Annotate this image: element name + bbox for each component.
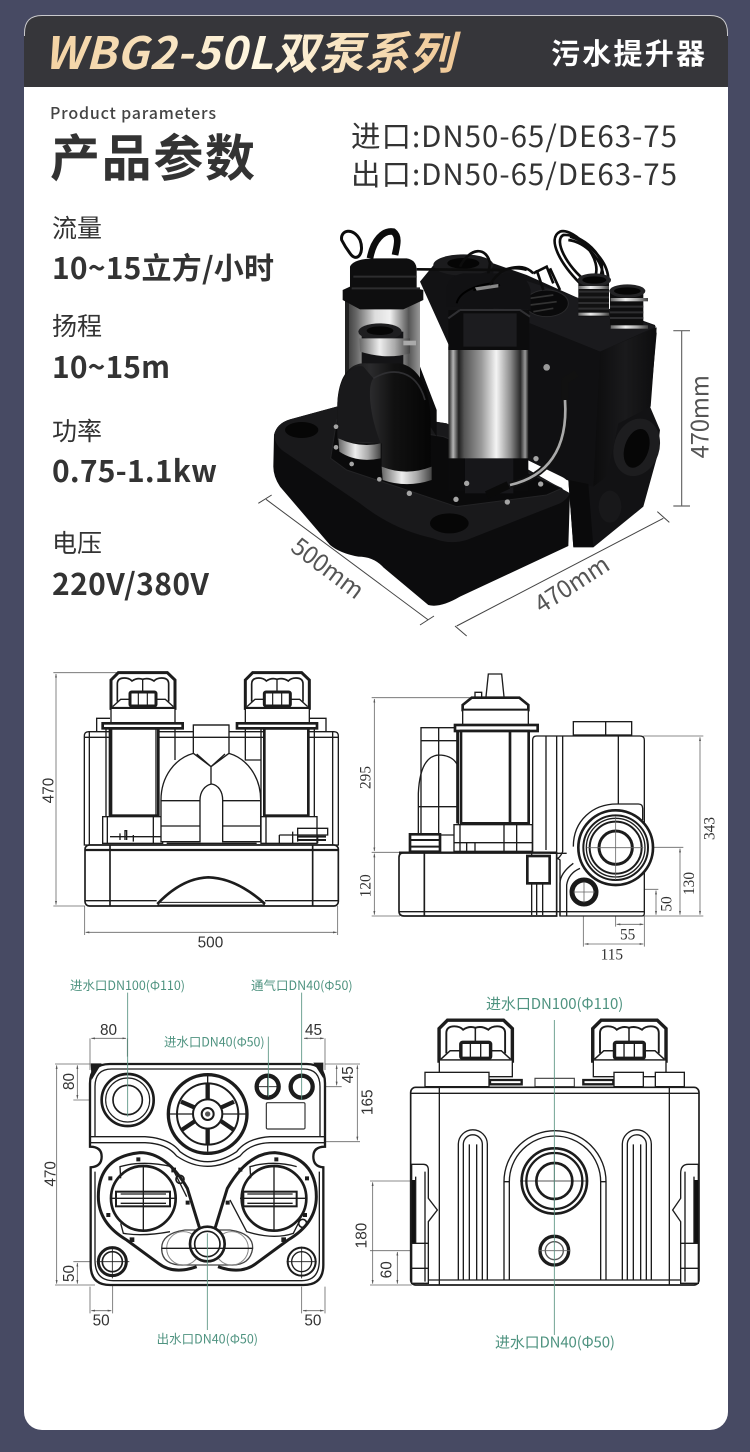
spec: head: [52, 307, 170, 387]
inlet and outlet sizes: 出口:DN50-65/DE63-75: [351, 152, 677, 194]
top view dimensions: 45: [305, 1022, 322, 1039]
section heading: 产品参数: [50, 119, 255, 191]
side outlet port: [606, 412, 667, 482]
inlet circle: [102, 1074, 154, 1126]
pump seats: [98, 1153, 316, 1270]
hose to tank: [487, 364, 577, 495]
spec: head: 10~15m: [52, 343, 170, 387]
front view dimensions: 470: [40, 778, 57, 803]
centre arch: [504, 1131, 606, 1280]
outlet cluster: [162, 1227, 253, 1265]
callouts: 进水口DN40(Φ50): [495, 1331, 615, 1352]
tank outline: [90, 1063, 325, 1285]
corrugated hoses: [578, 273, 648, 329]
spec: flow: [52, 209, 274, 288]
top view dimensions: 470: [42, 1161, 59, 1187]
dimension: height: [673, 331, 715, 506]
rib left: [458, 1130, 487, 1280]
side view dimensions: 295: [358, 766, 375, 789]
twin discharge pipe: [161, 725, 261, 843]
tank body: [420, 263, 660, 547]
callouts: 进水口DN40(Φ50): [164, 1033, 265, 1051]
side view dimensions: 115: [601, 946, 623, 963]
base: [399, 853, 644, 916]
side view dimensions: 120: [358, 874, 375, 897]
drawing: front view: [40, 673, 338, 951]
small ports: [257, 1076, 313, 1129]
spec: voltage: 电压: [52, 524, 102, 560]
inlet and outlet sizes: [351, 114, 677, 194]
spec: flow: 10~15立方/小时: [52, 244, 274, 288]
top view dimensions: 80: [100, 1022, 117, 1039]
side view dimensions: [358, 698, 718, 963]
spec: flow: 流量: [52, 209, 102, 245]
top view dimensions: 50: [304, 1312, 321, 1329]
callouts: [486, 993, 623, 1352]
rear pipe: [410, 728, 458, 852]
cable loops: [342, 231, 608, 290]
pump: [454, 674, 538, 852]
rear pump: [343, 258, 437, 437]
dimension: depth: [455, 512, 669, 636]
rear view dimensions: [354, 1181, 540, 1285]
pump right: [237, 673, 328, 843]
dimension: width: [258, 495, 434, 625]
product photo illustration: [258, 231, 715, 636]
dimension: height: 470mm: [680, 375, 715, 458]
callouts: 出水口DN40(Φ50): [157, 1329, 258, 1347]
header bar: [24, 15, 728, 87]
rib right: [622, 1130, 651, 1280]
side view dimensions: 55: [620, 926, 636, 943]
inlet and outlet sizes: 进口:DN50-65/DE63-75: [351, 114, 677, 156]
top view dimensions: [42, 1022, 377, 1329]
vent hub: [168, 1075, 247, 1153]
outlet port: [572, 804, 653, 904]
spec: power: [52, 412, 217, 491]
base: [273, 407, 570, 606]
handles: [425, 1020, 684, 1087]
spec: head: 扬程: [52, 307, 102, 343]
top view dimensions: 45: [340, 1066, 357, 1083]
drawing: top view: [42, 976, 377, 1347]
spec: voltage: 220V/380V: [52, 560, 209, 604]
top view dimensions: 50: [93, 1312, 110, 1329]
drawing: side view: [358, 674, 718, 963]
rear body: [411, 1087, 699, 1285]
subtitle: 污水提升器: [551, 31, 705, 73]
rear view dimensions: 180: [354, 1223, 371, 1248]
callouts: 通气口DN40(Φ50): [251, 976, 353, 994]
section heading: Product parameters: [50, 100, 216, 124]
side view dimensions: 343: [701, 817, 718, 840]
tank: [533, 722, 644, 916]
pump left: [103, 673, 183, 843]
dimension: depth: 470mm: [526, 545, 615, 620]
front pump: [447, 268, 531, 493]
bolts: [334, 424, 543, 505]
corner holes: [97, 1075, 317, 1278]
top view dimensions: 165: [360, 1089, 377, 1115]
side slots: [412, 1164, 698, 1283]
side view dimensions: 50: [659, 896, 676, 912]
front view dimensions: 500: [198, 934, 223, 951]
callouts: [70, 976, 353, 1347]
spec: power: 0.75-1.1kw: [52, 447, 217, 491]
front view dimensions: [40, 673, 338, 951]
spec: voltage: [52, 524, 209, 604]
tank outline: [84, 732, 338, 845]
base: [85, 845, 338, 906]
top view dimensions: 50: [61, 1265, 78, 1282]
callouts: 进水口DN100(Φ110): [486, 993, 623, 1014]
title: WBG2-50L双泵系列: [44, 17, 461, 82]
drawing: rear view: [354, 993, 699, 1352]
callouts: 进水口DN100(Φ110): [70, 976, 185, 994]
rear view dimensions: 60: [379, 1261, 396, 1278]
top view dimensions: 80: [61, 1073, 78, 1090]
spec: power: 功率: [52, 412, 102, 448]
inlet rings: [520, 1148, 588, 1265]
U-shaped discharge pipe: [337, 323, 432, 484]
side view dimensions: 130: [681, 872, 698, 895]
dimension: width: 500mm: [285, 528, 373, 606]
